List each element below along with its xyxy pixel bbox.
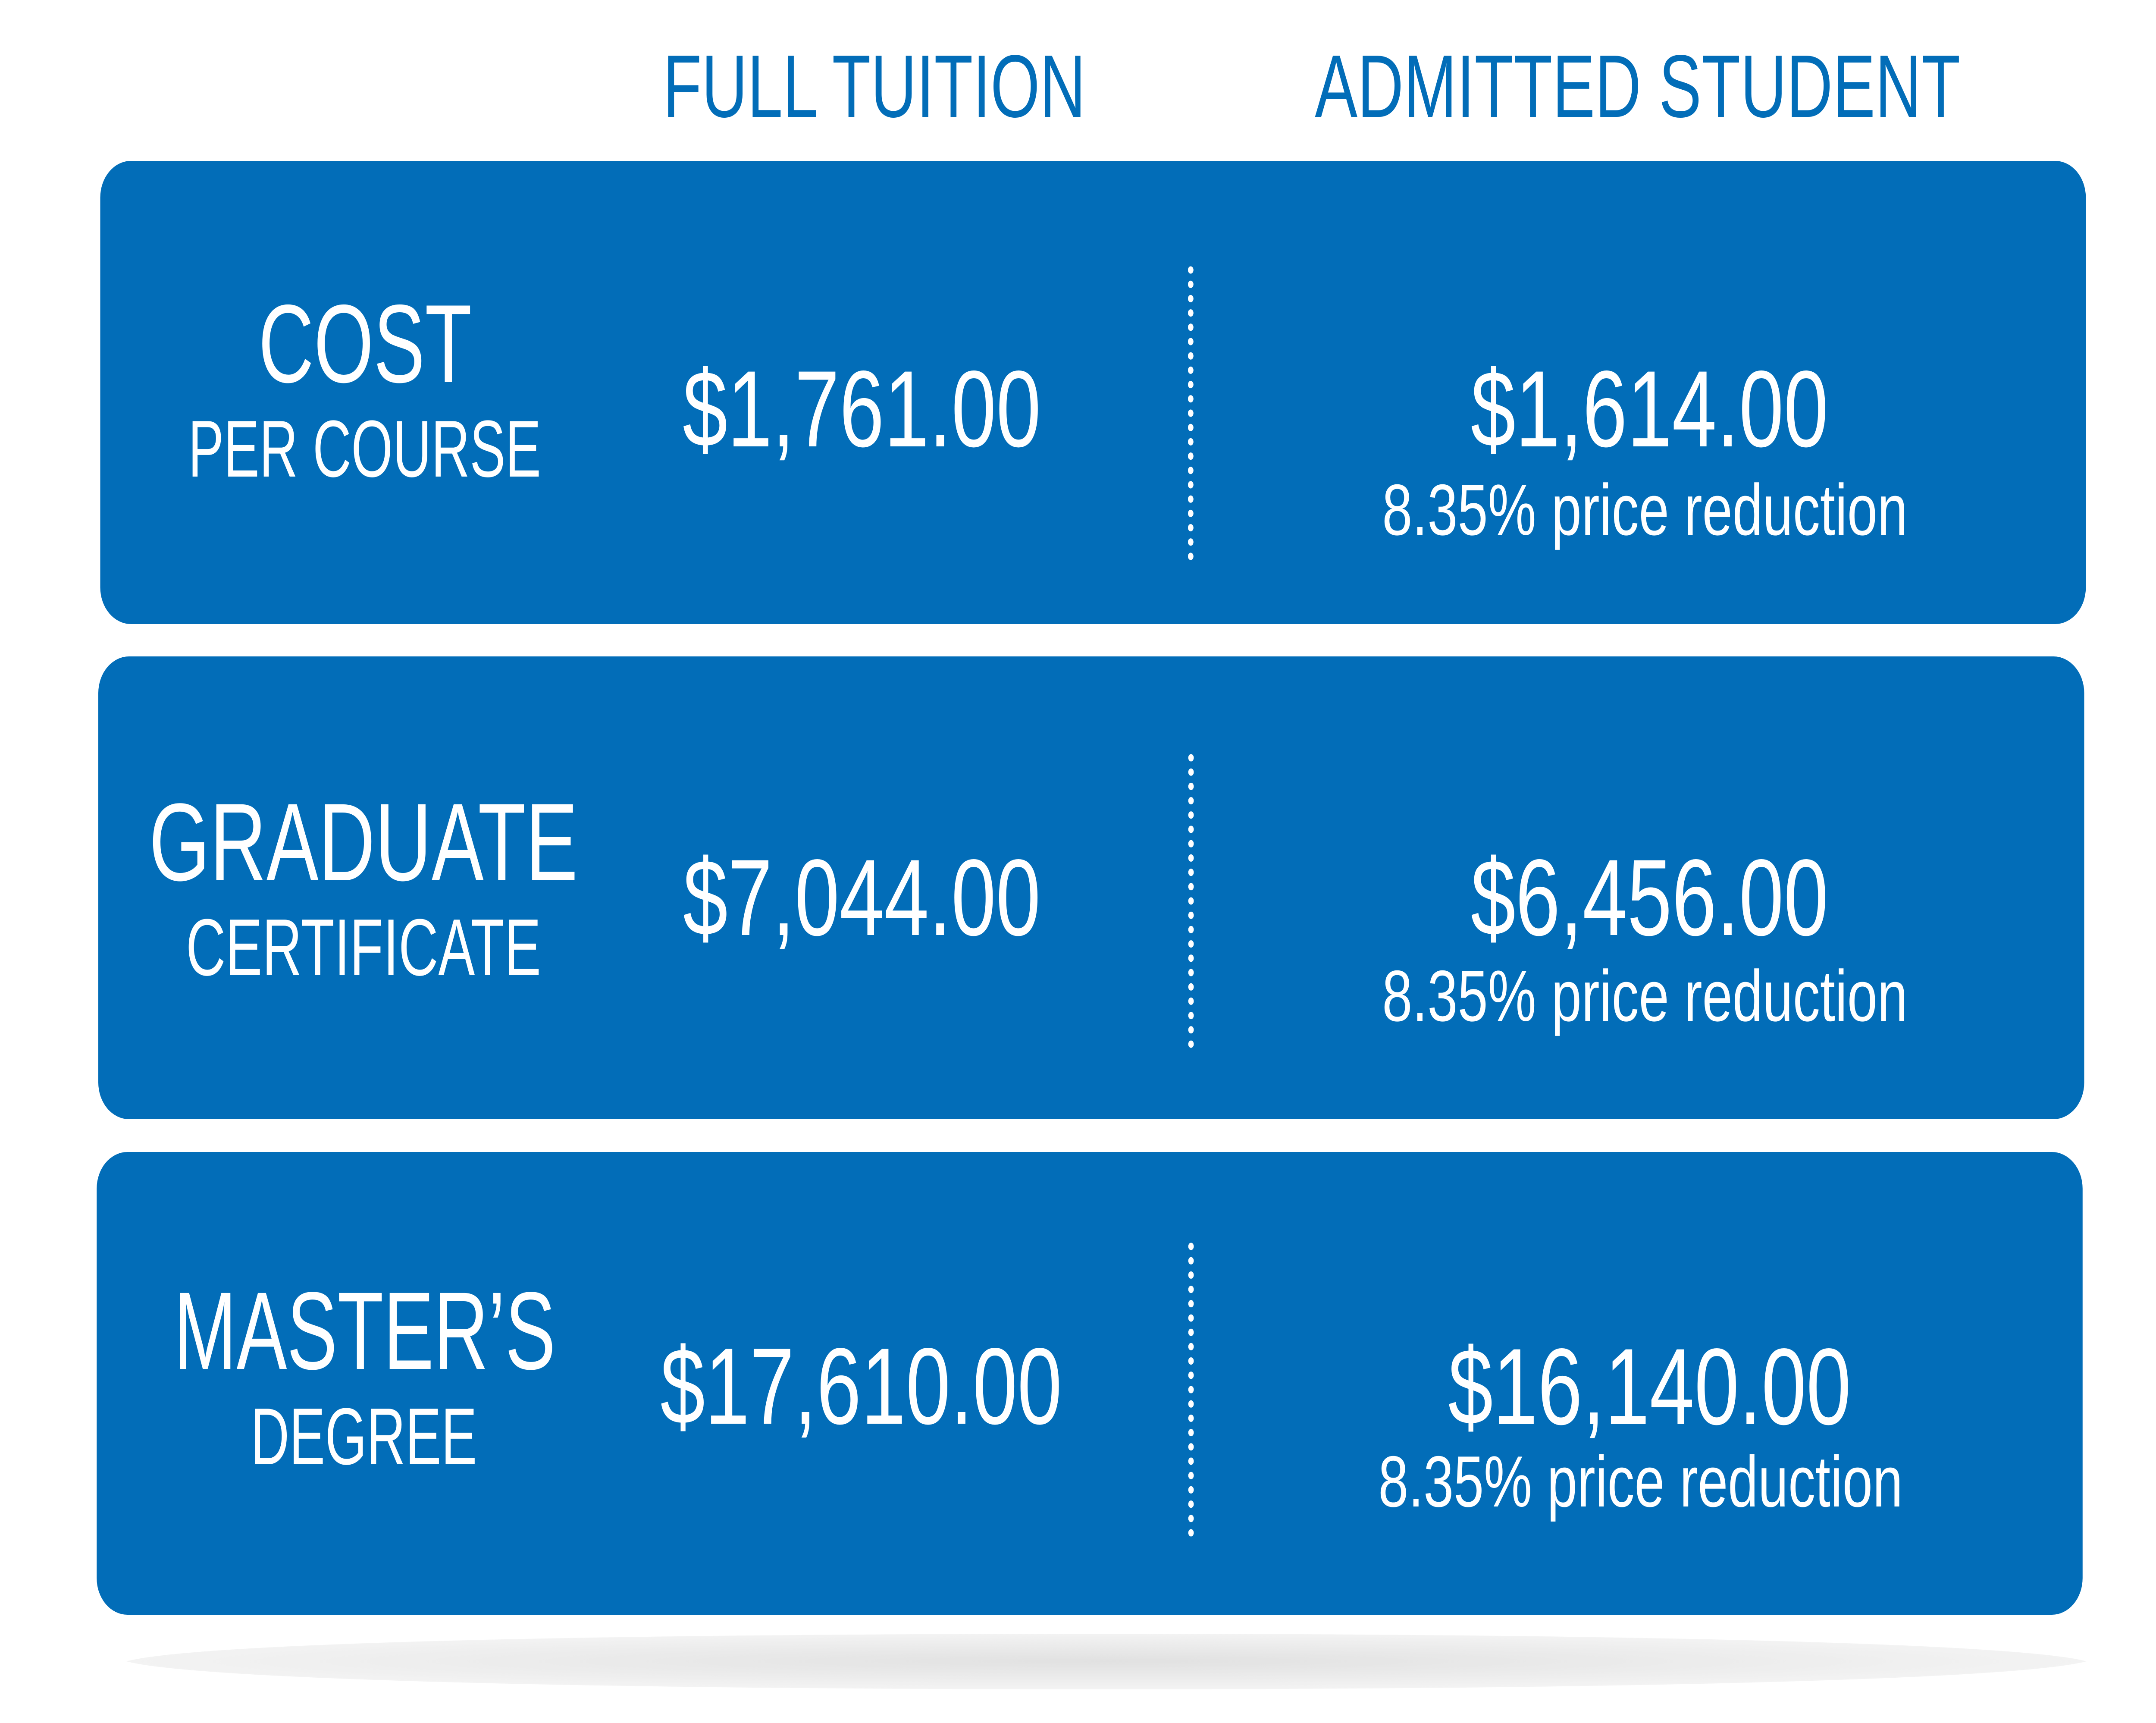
dotted divider [1187, 270, 1194, 557]
label: cost: COST [258, 282, 472, 406]
dotted divider [1188, 758, 1195, 1045]
label: graduate: GRADUATE [149, 780, 578, 904]
dotted divider [1188, 1246, 1195, 1533]
label: master's: MASTER’S [174, 1269, 555, 1392]
price reduction note: 8.35% price reduction [1382, 470, 1908, 550]
full tuition price: $7,044.00 [683, 837, 1040, 958]
panel: cost per course [100, 161, 2086, 624]
admitted student price: $1,614.00 [1471, 348, 1828, 470]
label: certificate: CERTIFICATE [186, 902, 541, 993]
ground shadow [126, 1634, 2087, 1689]
full tuition price: $1,761.00 [683, 348, 1041, 470]
full tuition price: $17,610.00 [660, 1326, 1062, 1447]
column heading: full tuition: FULL TUITION [663, 36, 1086, 136]
admitted student price: $16,140.00 [1448, 1326, 1851, 1447]
panel background [98, 656, 2084, 1119]
panel: graduate certificate [98, 656, 2084, 1119]
price reduction note: 8.35% price reduction [1378, 1442, 1903, 1522]
panel background [97, 1152, 2083, 1615]
panel background [100, 161, 2086, 624]
panel: master's degree [97, 1152, 2083, 1615]
label: degree: DEGREE [251, 1391, 477, 1482]
column heading: admitted student: ADMITTED STUDENT [1315, 36, 1960, 136]
admitted student price: $6,456.00 [1471, 837, 1828, 958]
price reduction note: 8.35% price reduction [1382, 956, 1908, 1036]
label: per course: PER COURSE [188, 404, 541, 494]
